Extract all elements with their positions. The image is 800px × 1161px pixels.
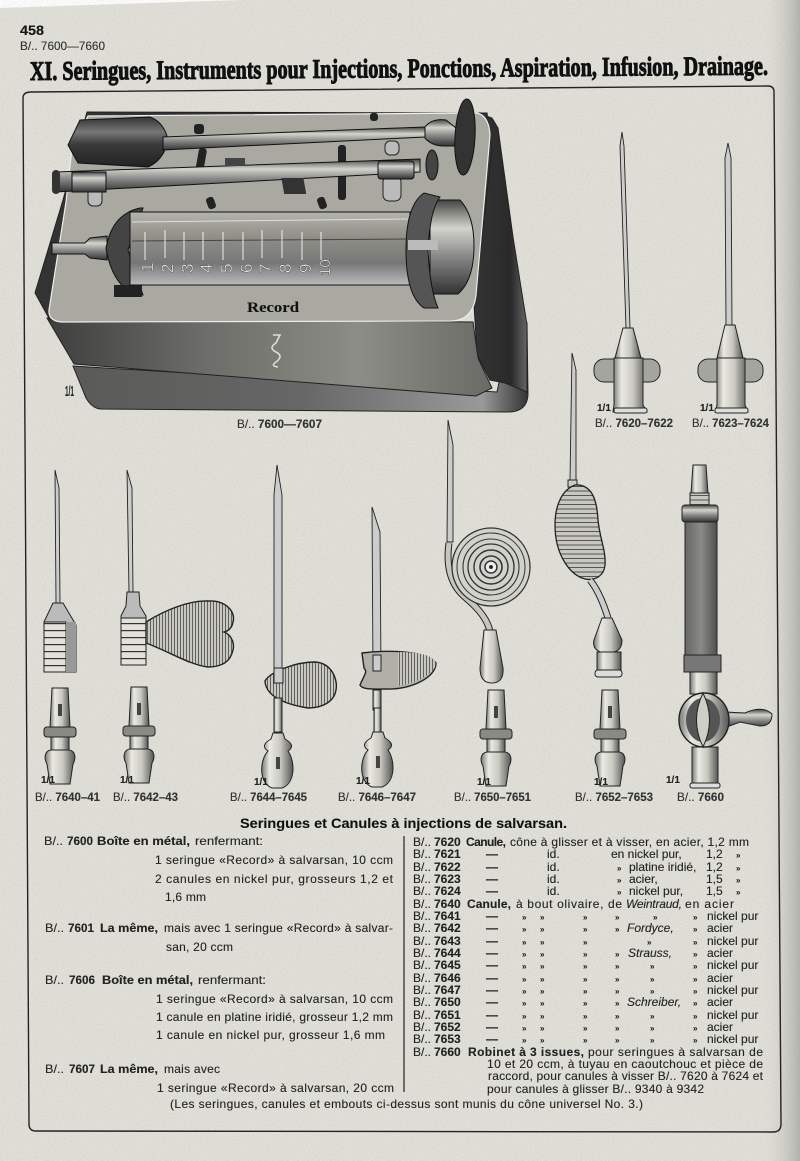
- rows 7620-7624: —: [486, 860, 498, 874]
- row 7660: B/..: [413, 1045, 431, 1059]
- valve handle: [724, 709, 772, 728]
- rows 7640-7653: »: [583, 1024, 588, 1033]
- rows 7640-7653: 7646: [434, 971, 461, 985]
- brand name: Record: [247, 300, 300, 316]
- rows 7640-7653: —: [486, 995, 498, 1009]
- rows 7640-7653: B/..: [413, 934, 431, 948]
- entry 7601: La même,: [100, 921, 158, 935]
- rows 7640-7653: —: [486, 1032, 498, 1046]
- rows 7640-7653: Fordyce,: [627, 921, 674, 935]
- row 7660: raccord, pour canules à visser B/.. 7620 à 7624 et: [488, 1069, 764, 1083]
- illustration: cannula 7646-7647: [356, 507, 436, 787]
- rows 7640-7653: »: [522, 962, 527, 971]
- rows 7640-7653: »: [615, 950, 620, 959]
- entry 7607: 1 seringue «Record» à salvarsan, 20 ccm: [157, 1081, 394, 1095]
- graduation numbers: 9: [296, 264, 315, 273]
- rows 7640-7653: »: [583, 913, 588, 922]
- rows 7640-7653: Schreiber,: [627, 995, 681, 1009]
- rows 7640-7653: nickel pur: [707, 958, 758, 972]
- rows 7640-7653: »: [583, 975, 588, 984]
- rows 7620-7624: id.: [547, 872, 560, 886]
- illustration: cannula 7640-41: [41, 470, 76, 786]
- entry 7601: B/..: [45, 921, 64, 935]
- syringe barrel: [130, 212, 410, 285]
- entry 7600: 2 canules en nickel pur, grosseurs 1,2 et: [155, 872, 394, 886]
- rows 7620-7624: 1,2: [706, 860, 723, 874]
- entry 7606: B/..: [45, 973, 64, 987]
- coil: [452, 528, 530, 606]
- rows 7640-7653: »: [650, 975, 655, 984]
- scale mark: 1/1: [254, 777, 268, 788]
- rows 7640-7653: nickel pur: [707, 934, 758, 948]
- rows 7640-7653: —: [486, 971, 498, 985]
- rows 7640-7653: »: [583, 950, 588, 959]
- rows 7620-7624: [413, 835, 749, 898]
- rows 7640-7653: »: [583, 987, 588, 996]
- rows 7640-7653: B/..: [413, 1008, 431, 1022]
- rows 7640-7653: Weintraud,: [626, 897, 682, 911]
- rows 7620-7624: B/..: [413, 860, 431, 874]
- rows 7620-7624: 1,5: [706, 872, 723, 886]
- syringe nozzle: [52, 236, 107, 260]
- label: 7623-7624: B/.. 7623–7624: [692, 416, 769, 430]
- flat paddle grip: [360, 651, 436, 689]
- rows 7620-7624: »: [617, 888, 622, 897]
- rows 7640-7653: 7644: [434, 946, 461, 960]
- label: 7646-7647: B/.. 7646–7647: [338, 790, 416, 804]
- rows 7640-7653: —: [486, 1008, 498, 1022]
- scale mark: 1/1: [700, 403, 714, 414]
- graduation numbers: 6: [237, 264, 256, 273]
- entry 7606: [45, 973, 393, 1042]
- scale mark: 1/1: [41, 775, 55, 786]
- rows 7640-7653: »: [522, 938, 527, 947]
- plunger with finger disc: [68, 99, 477, 175]
- rows 7620-7624: en nickel pur,: [611, 847, 682, 861]
- label: 7644-7645: B/.. 7644–7645: [230, 790, 307, 804]
- label: 7650-7651: B/.. 7650–7651: [454, 790, 531, 804]
- rows 7640-7653: »: [540, 1012, 545, 1021]
- rows 7640-7653: B/..: [413, 995, 431, 1009]
- rows 7640-7653: B/..: [413, 971, 431, 985]
- rows 7640-7653: »: [540, 925, 545, 934]
- label: 7660: B/.. 7660: [677, 790, 724, 804]
- rows 7640-7653: —: [486, 934, 498, 948]
- rows 7640-7653: B/..: [413, 958, 431, 972]
- rows 7640-7653: —: [486, 909, 498, 923]
- caduceus mark: [272, 335, 280, 367]
- entry 7600: renfermant:: [195, 834, 263, 848]
- rows 7640-7653: en acier: [685, 897, 734, 911]
- rows 7640-7653: acier: [707, 921, 733, 935]
- entry 7607: 7607: [69, 1062, 95, 1076]
- rows 7620-7624: platine iridié,: [629, 860, 696, 874]
- rows 7640-7653: 7651: [434, 1008, 461, 1022]
- page number: 458: [20, 22, 44, 38]
- rows 7640-7653: »: [522, 975, 527, 984]
- entry 7601: 7601: [68, 921, 94, 935]
- rows 7640-7653: acier: [707, 995, 733, 1009]
- rows 7620-7624: —: [486, 872, 498, 886]
- illustration: cannula 7620-7622: [594, 132, 660, 414]
- rows 7640-7653: »: [615, 999, 620, 1008]
- perforated plate: [49, 113, 490, 322]
- label: case: B/.. 7600—7607: [237, 417, 322, 431]
- rows 7640-7653: »: [540, 1036, 545, 1045]
- graduation numbers: 1: [138, 263, 157, 272]
- scale mark: 1/1: [477, 777, 491, 788]
- rows 7620-7624: nickel pur,: [629, 884, 683, 898]
- rows 7640-7653: 7642: [434, 921, 461, 935]
- rows 7640-7653: »: [540, 950, 545, 959]
- rows 7640-7653: »: [615, 1036, 620, 1045]
- case lower lid: [73, 323, 528, 412]
- illustration: three-way stopcock 7660: [679, 465, 772, 788]
- illustration: metal case with Record syringe: 1/1: [65, 383, 74, 400]
- rows 7620-7624: id.: [547, 860, 560, 874]
- rows 7640-7653: »: [650, 1036, 655, 1045]
- plate slots: [88, 113, 401, 210]
- entry 7601: san, 20 ccm: [166, 940, 233, 954]
- rows 7620-7624: 7623: [434, 872, 461, 886]
- column divider: [403, 836, 405, 1092]
- rows 7640-7653: B/..: [413, 909, 431, 923]
- row 7660: pour canules à glisser B/.. 9340 à 9342: [487, 1082, 704, 1096]
- entry 7607: [45, 1062, 394, 1095]
- rows 7640-7653: —: [486, 921, 498, 935]
- rows 7640-7653: »: [650, 1024, 655, 1033]
- syringe flange: [106, 208, 143, 295]
- rows 7620-7624: 1,2: [706, 847, 723, 861]
- rows 7640-7653: »: [693, 938, 698, 947]
- entry 7607: mais avec: [164, 1062, 220, 1076]
- rows 7640-7653: 7647: [434, 983, 461, 997]
- text block: right column price list: [413, 835, 764, 1096]
- rows 7620-7624: —: [486, 884, 498, 898]
- row 7660: [413, 1045, 764, 1096]
- entry 7606: 1 seringue «Record» à salvarsan, 10 ccm: [156, 992, 393, 1006]
- rows 7640-7653: 7641: [434, 909, 461, 923]
- rows 7620-7624: 7620: [434, 835, 461, 849]
- rows 7620-7624: id.: [547, 847, 560, 861]
- rows 7640-7653: »: [693, 987, 698, 996]
- rows 7640-7653: nickel pur: [707, 1008, 758, 1022]
- rows 7620-7624: »: [617, 864, 622, 873]
- graduation numbers: 2: [158, 264, 177, 273]
- row 7660: 10 et 20 ccm, à tuyau en caoutchouc et pièce de: [487, 1057, 763, 1071]
- rows 7640-7653: »: [583, 938, 588, 947]
- rows 7640-7653: »: [540, 962, 545, 971]
- rows 7620-7624: id.: [547, 884, 560, 898]
- rows 7640-7653: »: [693, 1036, 698, 1045]
- piston head: [430, 200, 474, 294]
- rows 7620-7624: cône à glisser et à visser, en acier, 1,2 mm: [510, 835, 749, 849]
- rows 7640-7653: nickel pur: [707, 983, 758, 997]
- scale mark: 1/1: [597, 403, 611, 414]
- rows 7640-7653: »: [647, 938, 652, 947]
- rows 7640-7653: »: [693, 913, 698, 922]
- rows 7640-7653: 7653: [434, 1032, 461, 1046]
- illustration: cannula 7623-7624: [698, 143, 763, 414]
- label: 7640-41: B/.. 7640–41: [35, 790, 100, 804]
- rows 7640-7653: B/..: [413, 946, 431, 960]
- label: 7642-43: B/.. 7642–43: [113, 790, 178, 804]
- rows 7620-7624: »: [617, 876, 622, 885]
- graduation numbers: 3: [178, 264, 197, 273]
- rows 7640-7653: 7643: [434, 934, 461, 948]
- rows 7640-7653: »: [693, 1024, 698, 1033]
- graduation numbers: 10: [317, 259, 334, 276]
- rows 7640-7653: —: [486, 958, 498, 972]
- case rear tray edge: [35, 112, 492, 320]
- entry 7606: Boîte en métal,: [102, 973, 193, 987]
- row 7660: 7660: [434, 1045, 461, 1059]
- rows 7640-7653: »: [693, 999, 698, 1008]
- illustration: cannula 7650-7651 with coil: [447, 420, 530, 788]
- entry 7600: Boîte en métal,: [97, 834, 190, 848]
- rows 7640-7653: —: [486, 946, 498, 960]
- rows 7640-7653: »: [615, 1012, 620, 1021]
- scale mark: 1/1: [594, 777, 608, 788]
- case front face: [47, 318, 492, 396]
- rows 7640-7653: »: [615, 987, 620, 996]
- rows 7640-7653: »: [583, 925, 588, 934]
- footnote: (Les seringues, canules et embouts ci-dessus sont munis du cône universel No. 3.): [170, 1097, 643, 1111]
- rows 7640-7653: »: [540, 975, 545, 984]
- rows 7640-7653: »: [650, 987, 655, 996]
- label: 7620-7622: B/.. 7620–7622: [595, 416, 673, 430]
- entry 7601: [45, 921, 393, 954]
- rows 7620-7624: »: [736, 851, 741, 860]
- rows 7640-7653: »: [540, 1024, 545, 1033]
- graduation numbers: 8: [276, 264, 295, 273]
- graduation numbers: 5: [217, 264, 236, 273]
- rows 7620-7624: B/..: [413, 835, 431, 849]
- kidney grip: [555, 485, 605, 579]
- entry 7606: renfermant:: [198, 973, 266, 987]
- entry 7601: mais avec 1 seringue «Record» à salvar-: [164, 921, 393, 935]
- rows 7620-7624: »: [736, 888, 741, 897]
- rows 7640-7653: 7652: [434, 1020, 461, 1034]
- entry 7606: 7606: [69, 973, 95, 987]
- rows 7640-7653: B/..: [413, 1032, 431, 1046]
- row 7660: Robinet à 3 issues,: [468, 1045, 584, 1059]
- rows 7640-7653: »: [583, 999, 588, 1008]
- scale mark: stopcock: 1/1: [666, 775, 680, 786]
- rows 7620-7624: acier,: [629, 872, 658, 886]
- rows 7640-7653: »: [615, 975, 620, 984]
- rows 7640-7653: »: [522, 987, 527, 996]
- rows 7620-7624: 1,5: [706, 884, 723, 898]
- rows 7640-7653: »: [615, 913, 620, 922]
- rows 7640-7653: »: [540, 913, 545, 922]
- rows 7640-7653: —: [486, 983, 498, 997]
- rows 7640-7653: [413, 897, 758, 1046]
- paddle grip: [265, 662, 336, 708]
- rows 7640-7653: acier: [707, 971, 733, 985]
- entry 7606: 1 canule en nickel pur, grosseur 1,6 mm: [156, 1028, 385, 1042]
- scale mark: 1/1: [120, 775, 134, 786]
- entry 7600: B/..: [44, 834, 63, 848]
- entry 7607: La même,: [100, 1062, 158, 1076]
- rows 7640-7653: B/..: [413, 983, 431, 997]
- rows 7640-7653: acier: [707, 946, 733, 960]
- graduation ticks: [145, 230, 321, 260]
- rows 7640-7653: »: [540, 938, 545, 947]
- rows 7640-7653: 7650: [434, 995, 461, 1009]
- rows 7640-7653: »: [522, 1012, 527, 1021]
- rows 7640-7653: Strauss,: [628, 946, 672, 960]
- valve body: [679, 693, 729, 747]
- rows 7620-7624: »: [736, 864, 741, 873]
- rows 7640-7653: »: [650, 1012, 655, 1021]
- case right side: [474, 113, 527, 392]
- rows 7640-7653: 7645: [434, 958, 461, 972]
- label: 7652-7653: B/.. 7652–7653: [575, 790, 653, 804]
- heart grip: [146, 601, 234, 667]
- graduation numbers: 7: [256, 264, 275, 273]
- illustration: cannula 7642-43 with heart grip: [120, 470, 234, 786]
- rows 7640-7653: »: [522, 950, 527, 959]
- graduation numbers: 4: [197, 264, 216, 273]
- rows 7640-7653: »: [522, 925, 527, 934]
- rows 7640-7653: B/..: [413, 1020, 431, 1034]
- rows 7640-7653: Canule,: [467, 897, 511, 911]
- rows 7640-7653: »: [522, 999, 527, 1008]
- entry 7600: [44, 834, 394, 904]
- entry 7600: 7600: [67, 834, 93, 848]
- rows 7640-7653: à bout olivaire, de: [516, 897, 622, 911]
- rows 7640-7653: »: [583, 1012, 588, 1021]
- rows 7640-7653: »: [650, 962, 655, 971]
- graduation numbers: [138, 259, 334, 276]
- rows 7620-7624: B/..: [413, 884, 431, 898]
- entry 7600: 1 seringue «Record» à salvarsan, 10 ccm: [155, 853, 393, 867]
- rows 7620-7624: B/..: [413, 847, 431, 861]
- second tube with ring: [52, 150, 438, 194]
- rows 7640-7653: nickel pur: [707, 1032, 758, 1046]
- rows 7640-7653: »: [540, 987, 545, 996]
- syringe: [52, 193, 474, 308]
- rows 7640-7653: nickel pur: [707, 909, 758, 923]
- rows 7640-7653: »: [693, 1012, 698, 1021]
- rows 7640-7653: »: [615, 962, 620, 971]
- rows 7640-7653: »: [693, 950, 698, 959]
- scale mark: 1/1: [356, 776, 370, 787]
- rows 7640-7653: B/..: [413, 897, 431, 911]
- rows 7620-7624: 7622: [434, 860, 461, 874]
- rows 7640-7653: 7640: [434, 897, 461, 911]
- entry 7607: B/..: [45, 1062, 64, 1076]
- rows 7620-7624: 7624: [434, 884, 461, 898]
- heading: section: Seringues et Canules à injections de salvarsan.: [240, 815, 567, 831]
- rows 7640-7653: »: [693, 925, 698, 934]
- rows 7640-7653: —: [486, 1020, 498, 1034]
- rows 7640-7653: »: [522, 1036, 527, 1045]
- entry 7606: 1 canule en platine iridié, grosseur 1,2 mm: [156, 1010, 393, 1024]
- entry 7600: 1,6 mm: [165, 890, 206, 904]
- rows 7640-7653: »: [522, 1024, 527, 1033]
- rows 7620-7624: —: [486, 847, 498, 861]
- rows 7640-7653: B/..: [413, 921, 431, 935]
- rows 7620-7624: 7621: [434, 847, 461, 861]
- rows 7640-7653: »: [693, 962, 698, 971]
- illustration: cannula 7644-7645: [254, 465, 336, 788]
- rows 7620-7624: B/..: [413, 872, 431, 886]
- illustration: cannula 7652-7653 with kidney grip: [555, 353, 626, 788]
- range reference: B/.. 7600—7660: [20, 39, 105, 53]
- rows 7640-7653: »: [653, 913, 658, 922]
- rows 7620-7624: Canule,: [466, 835, 506, 849]
- rows 7640-7653: acier: [707, 1020, 733, 1034]
- rows 7620-7624: »: [736, 876, 741, 885]
- text block: left column: [44, 834, 394, 1095]
- row 7660: pour seringues à salvarsan de: [588, 1045, 763, 1059]
- rows 7640-7653: »: [540, 999, 545, 1008]
- illustration: metal case with Record syringe: [35, 99, 528, 412]
- rows 7640-7653: »: [583, 962, 588, 971]
- rows 7640-7653: »: [522, 913, 527, 922]
- rows 7640-7653: »: [615, 1024, 620, 1033]
- rows 7640-7653: »: [615, 925, 620, 934]
- rows 7640-7653: »: [583, 1036, 588, 1045]
- rows 7640-7653: »: [693, 975, 698, 984]
